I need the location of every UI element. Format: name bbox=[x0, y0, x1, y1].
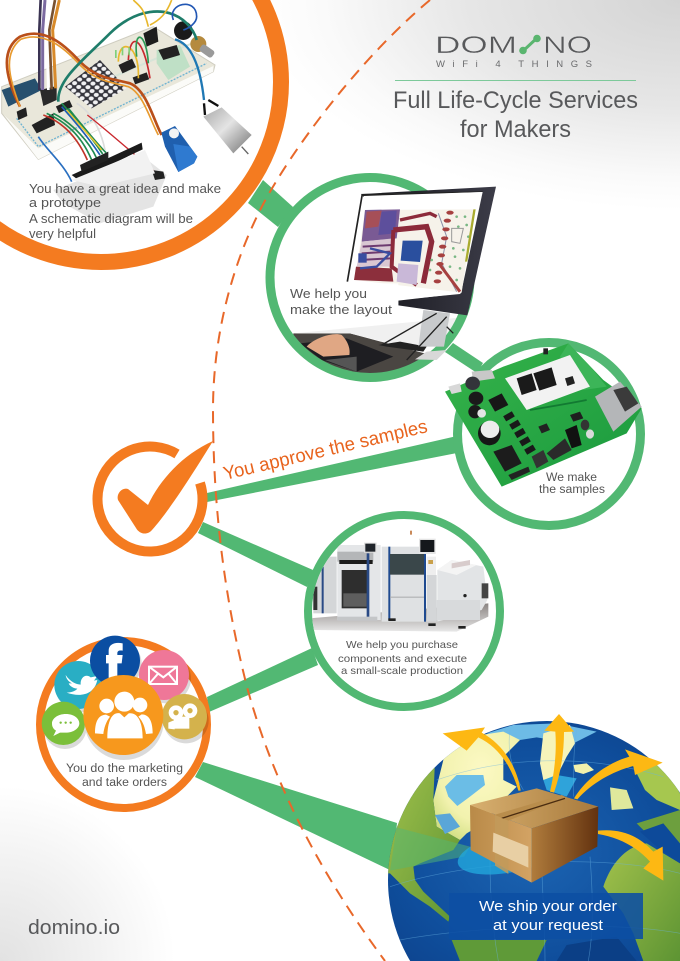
panel: layout circle bbox=[270, 178, 496, 383]
photo: breadboard prototype bbox=[2, 0, 252, 223]
green connector: prototype to layout bbox=[248, 180, 293, 227]
faded caption backing bbox=[287, 283, 398, 323]
caption: production bbox=[338, 639, 467, 677]
panel: logo and title bbox=[393, 32, 638, 143]
caption: shipping: at your request bbox=[493, 917, 604, 934]
translucent band over globe bbox=[390, 827, 470, 871]
caption: marketing: and take orders bbox=[82, 777, 167, 789]
photo: desk and keyboard bbox=[293, 318, 456, 373]
caption: marketing bbox=[66, 763, 183, 789]
logo tagline: WiFi 4 THINGS bbox=[436, 59, 592, 70]
caption: layout: We help you bbox=[290, 286, 367, 301]
caption box bbox=[449, 893, 643, 939]
panel: marketing circle bbox=[40, 636, 209, 808]
orange ring bbox=[40, 641, 207, 808]
green connector: approval to samples bbox=[207, 436, 457, 502]
caption: marketing: You do the marketing bbox=[66, 763, 183, 775]
logo green link icon bbox=[519, 35, 541, 54]
caption: samples: the samples bbox=[539, 484, 605, 496]
logo wordmark left: DOM bbox=[435, 32, 517, 59]
green connector: marketing to production bbox=[207, 648, 318, 712]
land masses bbox=[433, 732, 520, 840]
icon: chat bbox=[42, 702, 85, 745]
green connector: marketing to shipping bbox=[195, 762, 397, 871]
caption: production: components and execute bbox=[338, 653, 467, 665]
panel: shipping globe bbox=[387, 714, 680, 961]
caption: shipping: We ship your order bbox=[479, 898, 617, 915]
caption: prototype bbox=[29, 181, 221, 241]
icon: video camera bbox=[162, 694, 207, 739]
servo bbox=[161, 126, 197, 172]
title line one: Full Life-Cycle Services bbox=[393, 87, 638, 114]
icon: twitter bbox=[54, 661, 102, 709]
green connector: approval to production bbox=[198, 522, 313, 587]
icon: facebook bbox=[90, 636, 140, 686]
caption: layout: make the layout bbox=[290, 302, 392, 317]
caption: samples bbox=[539, 472, 605, 496]
cardboard box bbox=[470, 788, 598, 883]
caption: samples: We make bbox=[546, 472, 597, 484]
white circle background bbox=[0, 0, 281, 262]
caption: production: a small-scale production bbox=[341, 665, 463, 677]
orange check mark bbox=[118, 441, 213, 534]
panel: approval check icon bbox=[98, 441, 213, 552]
panel: samples circle bbox=[445, 342, 642, 526]
logo wordmark right: NO bbox=[543, 32, 592, 59]
caption: prototype: very helpful bbox=[29, 226, 96, 241]
caption: shipping bbox=[479, 898, 617, 934]
panel: production circle bbox=[307, 515, 503, 707]
photo: green circuit board bbox=[445, 343, 642, 487]
photo: SMT production machines bbox=[307, 531, 503, 700]
globe illustration bbox=[387, 714, 680, 961]
caption: prototype: a prototype bbox=[29, 195, 101, 210]
orange ring bbox=[0, 0, 281, 262]
green connector: layout to samples bbox=[445, 343, 483, 373]
title line two: for Makers bbox=[460, 116, 571, 143]
caption: production: We help you purchase bbox=[346, 639, 458, 651]
website address: domino.io bbox=[28, 917, 120, 939]
green ring bbox=[458, 342, 640, 526]
label: you approve the samples: You approve the samples bbox=[221, 416, 430, 485]
shipping arrows bbox=[443, 714, 663, 881]
caption: prototype: A schematic diagram will be bbox=[29, 211, 193, 226]
social media icons bbox=[42, 636, 209, 760]
panel: prototype circle bbox=[0, 0, 281, 262]
caption: layout bbox=[290, 286, 392, 317]
dashed orange timeline curve bbox=[213, 0, 430, 961]
icon: mail bbox=[139, 650, 189, 700]
orange open ring bbox=[98, 447, 203, 552]
monitor with PCB layout bbox=[287, 187, 496, 360]
caption: prototype: You have a great idea and make bbox=[29, 181, 221, 196]
green ring bbox=[270, 178, 470, 378]
green ring bbox=[308, 515, 500, 707]
white circle fill bbox=[270, 178, 470, 378]
icon: group of people bbox=[83, 675, 163, 755]
motor bbox=[203, 107, 252, 153]
